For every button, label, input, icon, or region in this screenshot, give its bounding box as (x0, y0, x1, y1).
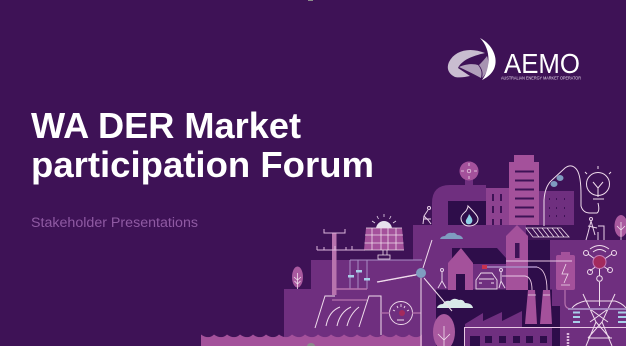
plug wire and bulb (544, 166, 611, 226)
hydro dam (315, 274, 420, 335)
bottom marker (307, 343, 315, 346)
person: cyclist (423, 206, 431, 224)
tree: left (292, 266, 303, 289)
title (31, 105, 374, 185)
person with dog (586, 218, 604, 240)
person: lower (567, 333, 569, 346)
people walking (438, 268, 505, 288)
network node and lines (378, 240, 452, 346)
battery wire (565, 290, 572, 309)
city buildings (486, 155, 574, 225)
icon: AEMO swirl (448, 38, 496, 80)
pipe structure with gauge (432, 162, 486, 225)
terrain blocks (284, 225, 626, 346)
dark ground (436, 290, 552, 346)
utility pole (317, 229, 365, 295)
dark roof and column (452, 240, 550, 290)
water (201, 334, 422, 346)
gauge (381, 302, 421, 324)
cloud: white (437, 299, 473, 308)
icon: smart network hub (584, 246, 616, 306)
subtitle: Stakeholder Presentations (31, 215, 198, 230)
icon: sun (372, 214, 396, 229)
factory (465, 311, 552, 346)
title: participation Forum (31, 144, 374, 185)
icon: flame (461, 206, 478, 226)
logo wordmark: AEMO (504, 48, 580, 79)
icon: solar panel (364, 228, 404, 259)
cloud (440, 233, 463, 239)
sluice pipes (336, 260, 422, 289)
car with charger (476, 261, 572, 290)
logo tagline: AUSTRALIAN ENERGY MARKET OPERATOR (501, 76, 581, 80)
title: WA DER Market (31, 105, 301, 146)
power line (464, 328, 626, 346)
battery (556, 252, 575, 290)
logo (448, 38, 581, 80)
houses (448, 225, 528, 290)
chimneys (525, 290, 552, 324)
dark column lower (552, 306, 560, 346)
floor solar panel (526, 228, 569, 237)
tree: lower (433, 314, 455, 346)
left lower wedge (422, 262, 436, 335)
illustration: energy landscape (201, 155, 626, 346)
top marker (308, 0, 313, 1)
tree: right top (614, 215, 626, 240)
icon: transmission tower (568, 294, 626, 346)
